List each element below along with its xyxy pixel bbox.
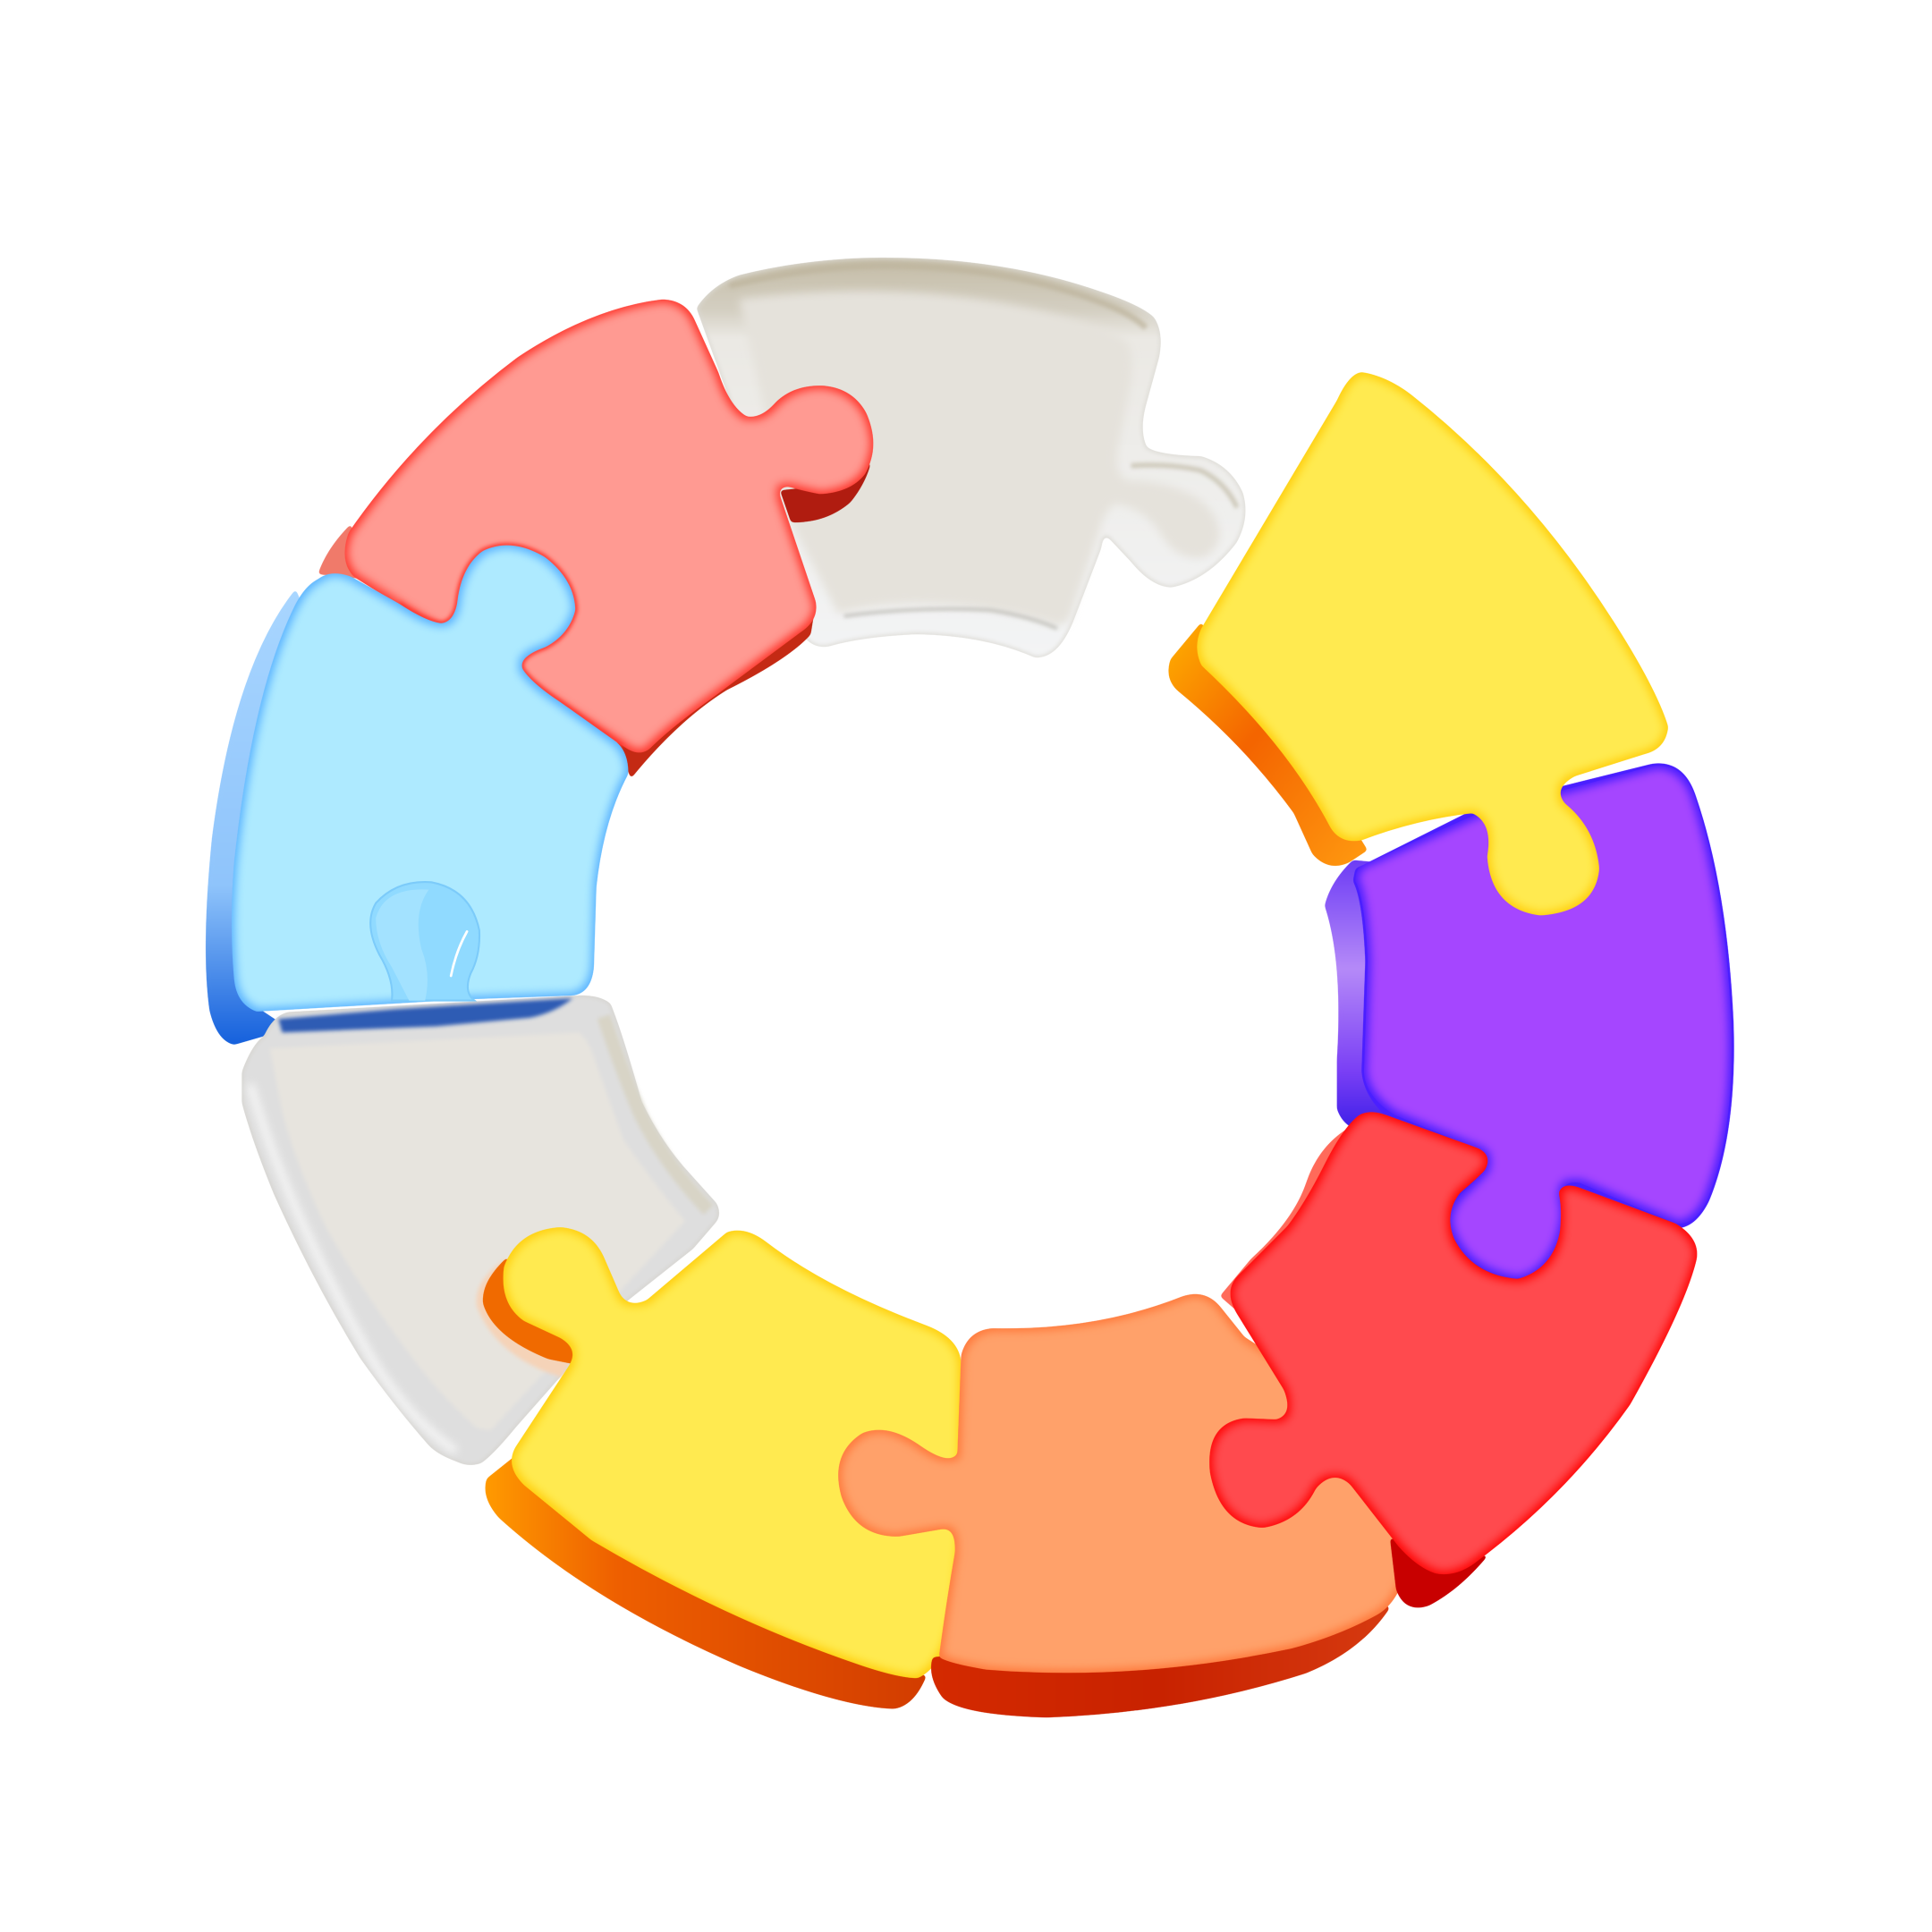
orange face (838, 1294, 1417, 1673)
piece: pale red top left (318, 300, 873, 779)
tab lighter area (376, 889, 428, 1001)
left side wall (318, 523, 363, 579)
red lower side wall (1390, 1538, 1488, 1607)
piece: orange bottom (838, 1294, 1417, 1717)
blue edge base (232, 546, 629, 1012)
yellow side wall (1168, 623, 1368, 866)
tab side wall (483, 1257, 579, 1365)
blue seen through glass (278, 998, 573, 1032)
tan rim band (730, 266, 1146, 327)
tab shadow (780, 462, 871, 522)
orange bottom side wall (931, 1589, 1390, 1717)
red contour shadow (399, 546, 623, 747)
purple edge base (1353, 763, 1734, 1288)
blue face (232, 546, 629, 1012)
glass face (740, 292, 1220, 625)
piece: light blue left (206, 546, 629, 1045)
yellow face (1197, 372, 1668, 916)
pink edge base (344, 300, 873, 753)
piece: yellow bottom left (477, 1227, 961, 1709)
clear glass body (242, 996, 718, 1464)
purple face (1355, 766, 1732, 1279)
piece: yellow upper right (1168, 372, 1668, 916)
piece: glass lower left (242, 996, 718, 1464)
red face (1209, 1112, 1697, 1574)
red upper side wall (1220, 1127, 1361, 1312)
yellow bottom side wall (485, 1454, 927, 1709)
purple side wall (1325, 860, 1393, 1131)
clear outer highlight strip (250, 1084, 456, 1452)
piece: red lower right (1209, 1112, 1697, 1607)
tab reflection (477, 1259, 573, 1377)
glass body (698, 258, 1244, 657)
piece: glass top (698, 258, 1244, 657)
yellow face (503, 1227, 961, 1678)
yellow edge base (503, 1227, 961, 1678)
glass face (270, 1032, 685, 1430)
pink face (344, 300, 873, 753)
right rim tint (604, 1016, 708, 1210)
tab rim band (1131, 465, 1237, 508)
yellow edge base (1197, 372, 1668, 916)
tab highlights (451, 931, 467, 976)
glass tab seen through blue (370, 882, 479, 1001)
bottom rim line (844, 609, 1057, 629)
blue side wall (206, 589, 302, 1045)
orange edge base (838, 1294, 1417, 1673)
red edge base (1209, 1112, 1697, 1574)
piece: purple right (1325, 763, 1734, 1288)
lower side wall (616, 604, 816, 779)
